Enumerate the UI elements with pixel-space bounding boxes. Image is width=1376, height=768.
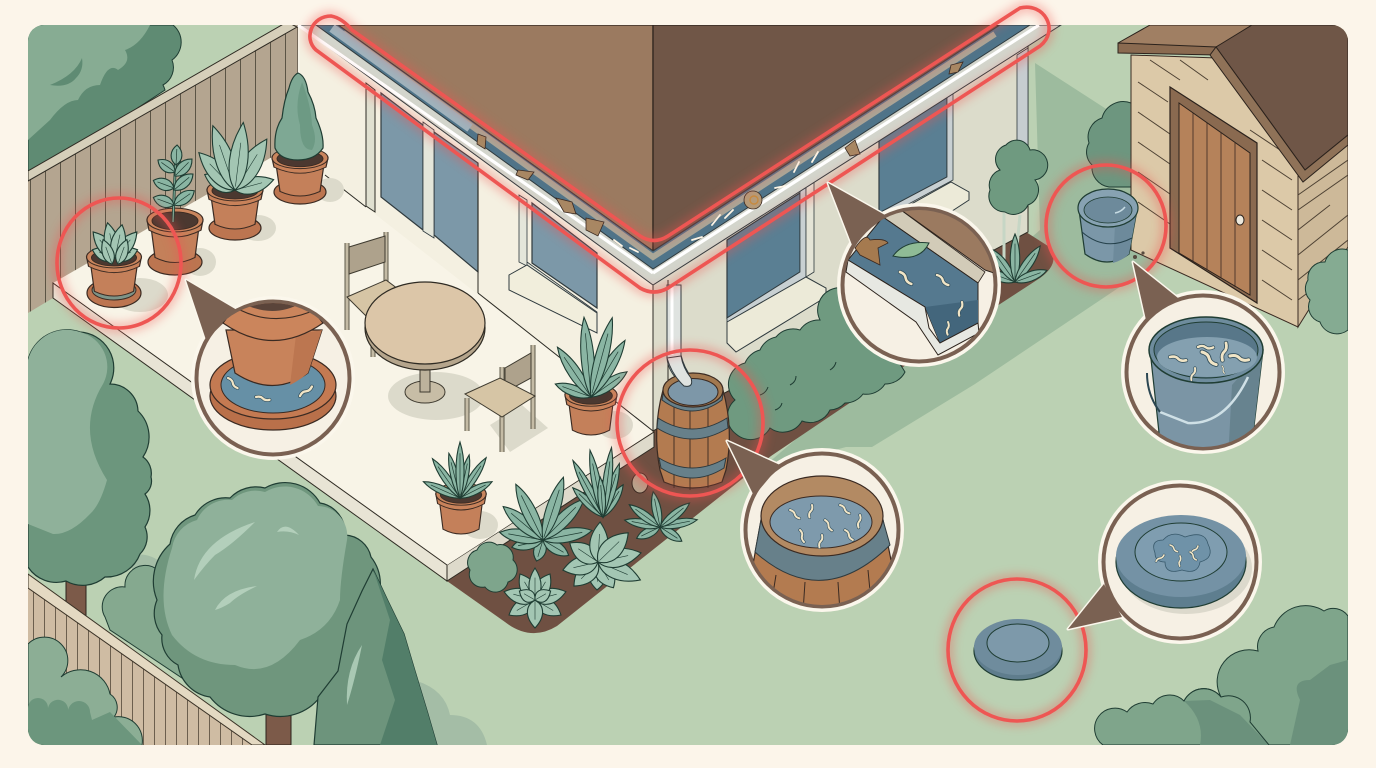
bucket by shed	[1078, 189, 1145, 263]
succulent	[502, 568, 568, 628]
back bush lower left	[102, 565, 185, 680]
callout: bucket	[1123, 262, 1283, 460]
magnified pot	[226, 330, 322, 386]
magnified plate	[1116, 516, 1246, 608]
magnified bucket	[1150, 350, 1263, 460]
pot: tall leafy plant	[147, 145, 203, 275]
rain barrel	[657, 356, 729, 490]
background tree shadows	[132, 554, 487, 745]
bottom right bushes	[1095, 606, 1348, 745]
magnified water	[848, 217, 978, 343]
roof	[338, 25, 1000, 251]
pot: succulent with saucer	[87, 221, 142, 308]
window 2	[434, 132, 478, 272]
callout: saucer	[186, 280, 353, 458]
lower fence	[28, 574, 265, 745]
window 3	[532, 203, 597, 308]
downspout	[666, 284, 689, 376]
patio shadows	[112, 178, 633, 539]
fan plant	[624, 491, 698, 545]
flower bed mulch	[447, 232, 1053, 633]
gutter debris	[477, 62, 963, 236]
tall spike plant	[569, 447, 627, 520]
spiky plant	[498, 475, 593, 563]
ring: bucket	[1046, 165, 1166, 287]
patio pot front	[422, 442, 494, 534]
magnified roof	[894, 205, 1000, 275]
pot: broad leaf plant	[192, 121, 276, 240]
hedge behind shed	[1087, 102, 1131, 187]
ring: gutter	[310, 7, 1049, 292]
hedge behind fence	[28, 25, 181, 180]
table and chairs	[347, 232, 535, 452]
saucer plant pots	[87, 73, 328, 308]
large round tree	[153, 483, 380, 745]
round shrub	[468, 542, 517, 592]
ring: plate	[948, 579, 1086, 721]
pot: topiary cone	[272, 73, 328, 204]
window 1	[381, 93, 423, 230]
plate shadow	[1120, 522, 1252, 614]
bed plants	[468, 447, 698, 628]
back fence	[28, 22, 298, 313]
window sill 5	[912, 182, 970, 211]
window sill	[509, 265, 597, 333]
larvae	[228, 376, 238, 390]
window 5	[879, 92, 947, 213]
shrub at house corner	[988, 140, 1048, 284]
leafy plant	[561, 522, 644, 592]
shed door knob	[1236, 215, 1244, 225]
patio slab	[53, 25, 654, 581]
left tree	[28, 330, 152, 635]
downspout end	[667, 356, 692, 386]
window 4	[727, 193, 800, 318]
shed front wall	[1131, 55, 1298, 327]
callout: plate	[1068, 482, 1260, 642]
ring: barrel	[617, 350, 763, 496]
red highlight rings	[57, 7, 1166, 721]
bush right of shed	[1305, 249, 1348, 334]
plate on lawn	[974, 619, 1062, 680]
leaf	[893, 243, 929, 257]
magnified saucer	[210, 362, 336, 430]
shed side wall	[1298, 133, 1348, 327]
gutter lip	[846, 260, 979, 355]
callout: barrel	[727, 441, 902, 620]
shed	[1087, 25, 1348, 334]
clogged gutter	[298, 25, 1061, 285]
callout: gutter	[828, 183, 1000, 365]
house left wall	[324, 82, 652, 432]
debris	[855, 237, 888, 265]
shed roof	[1118, 25, 1255, 47]
larvae	[900, 270, 911, 286]
stones	[632, 473, 648, 493]
house shadow on lawn	[760, 63, 1175, 470]
window sill 4	[727, 277, 826, 352]
front chair	[465, 345, 535, 452]
shed door	[1170, 87, 1257, 303]
hedge along house	[727, 288, 905, 440]
cone tree	[314, 569, 437, 745]
ring: saucer pot	[57, 198, 181, 328]
back chair	[347, 232, 402, 357]
magnified barrel	[745, 520, 900, 612]
table	[365, 282, 485, 403]
house right wall	[653, 40, 1028, 431]
patio pot right	[552, 316, 630, 435]
bush lower left corner	[28, 637, 142, 745]
